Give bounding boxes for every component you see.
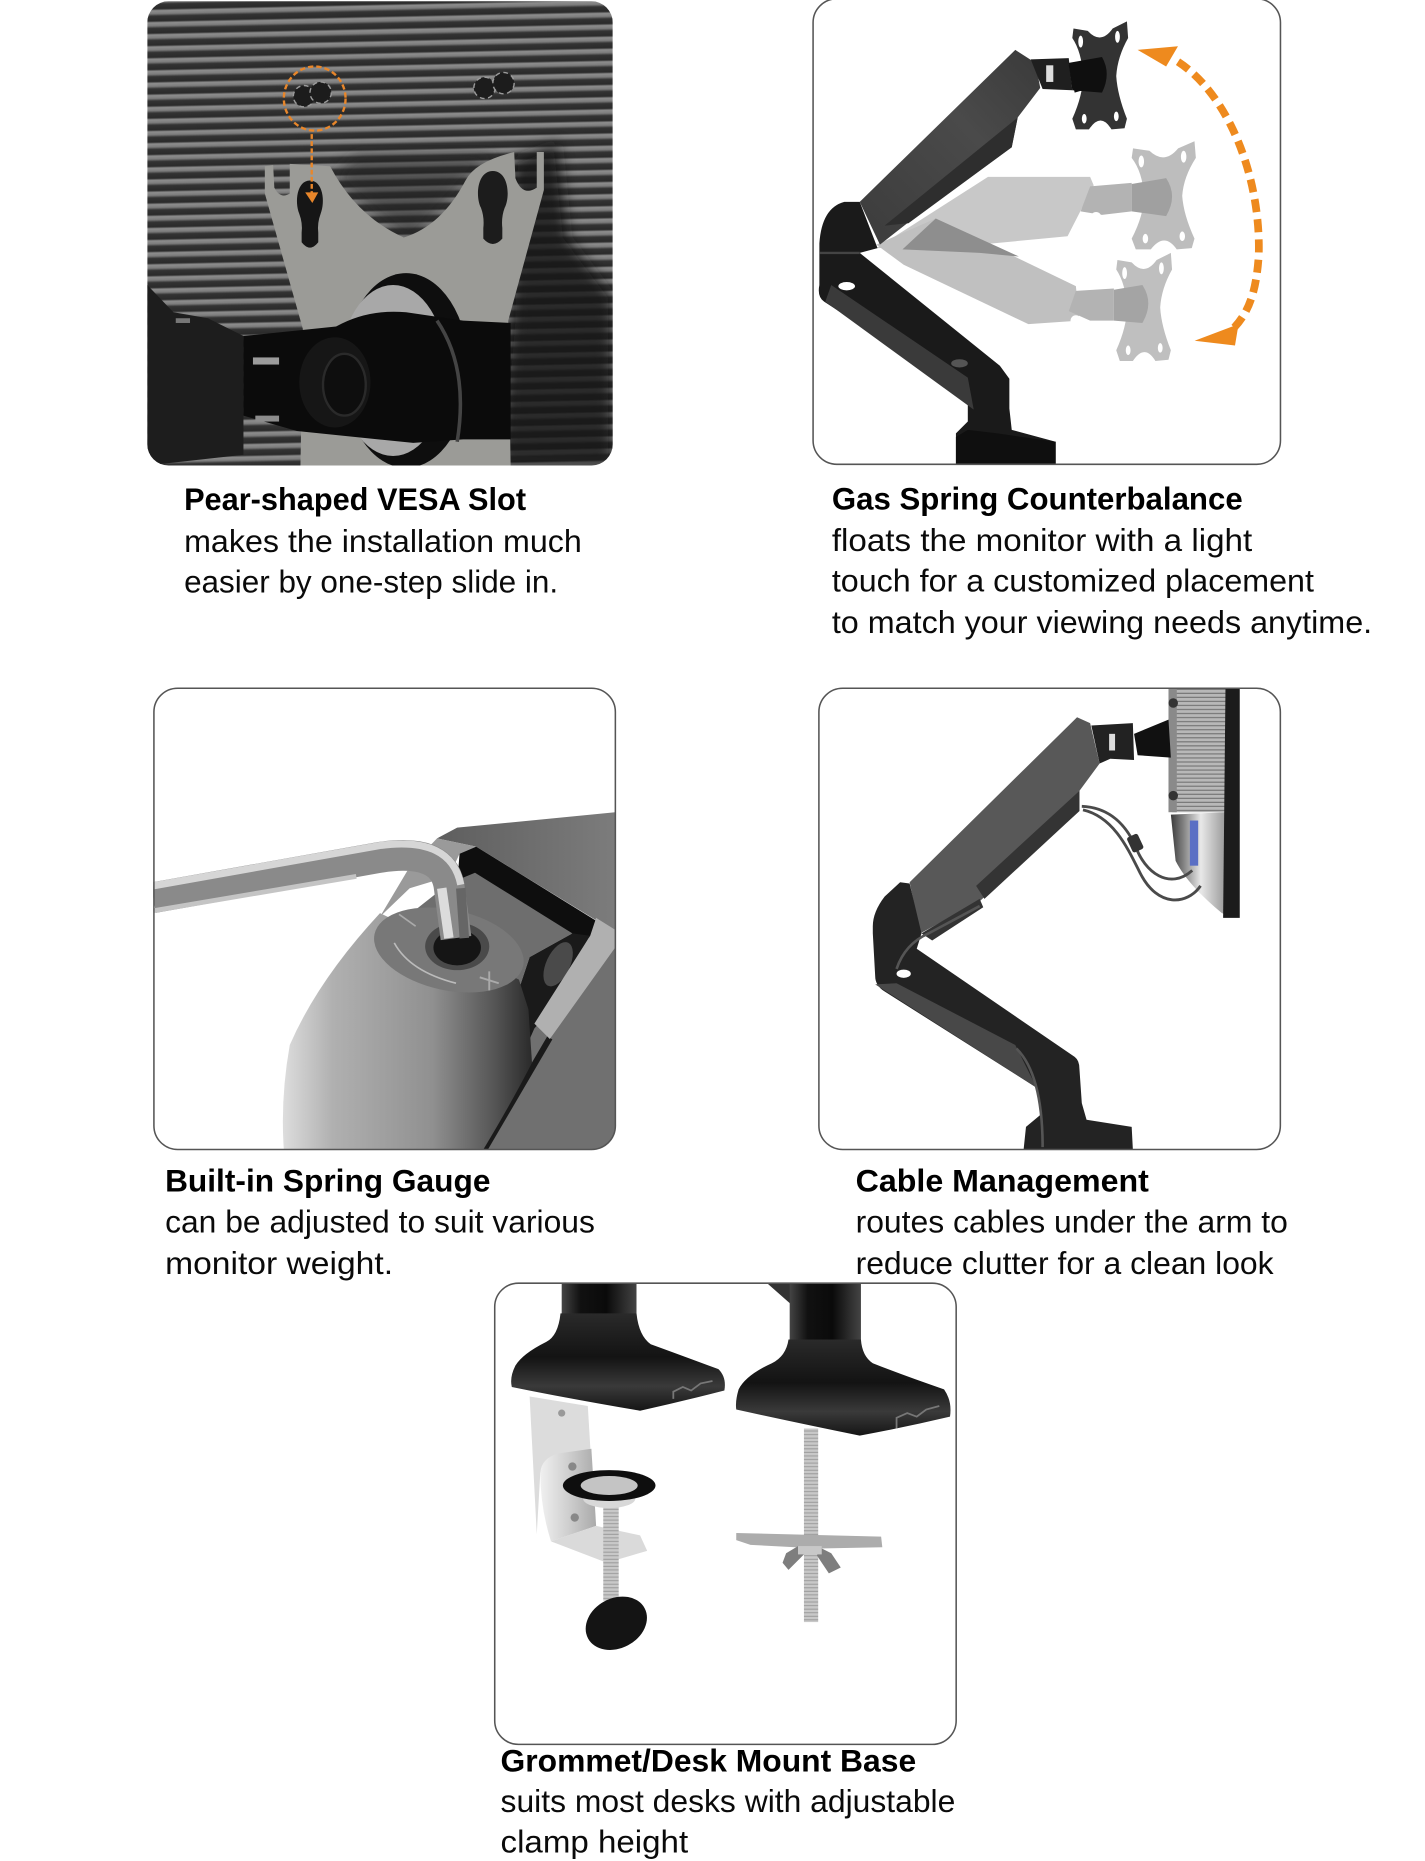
frame strip — [534, 918, 615, 1039]
text block: Cable Management — [856, 1164, 1288, 1281]
arm top housing — [437, 812, 615, 932]
orange curved arrow — [1138, 46, 1259, 346]
text block: Pear-shaped VESA Slot: Pear-shaped VESA Slot — [184, 482, 527, 517]
ghost connector: mid — [1080, 182, 1132, 215]
text block: Gas Spring Counterbalance — [832, 481, 1372, 640]
right base — [736, 1280, 951, 1436]
spring recess — [520, 934, 590, 1038]
VESA plate — [265, 152, 544, 465]
shadow on monitor back — [499, 142, 613, 465]
clamp: bracket plate — [540, 1449, 596, 1541]
screw: right — [474, 72, 514, 99]
arm cable routing — [897, 906, 1043, 1147]
text block: Grommet/Desk Mount Base: suits most desks with adjustable — [501, 1784, 955, 1819]
text block: Built-in Spring Gauge — [165, 1164, 595, 1281]
pear-shaped slot: left — [297, 180, 323, 248]
text block: Gas Spring Counterbalance: floats the monitor with a light — [832, 523, 1252, 558]
blue VGA connector — [1190, 821, 1198, 866]
clamp: screw — [603, 1506, 619, 1601]
black arm — [243, 312, 511, 443]
orange dashed circle — [284, 66, 346, 131]
text block: Pear-shaped VESA Slot: easier by one-step slide in. — [184, 565, 558, 600]
gauge head body — [283, 913, 532, 1149]
text block: Grommet/Desk Mount Base: clamp height — [501, 1824, 688, 1859]
text block: Built-in Spring Gauge: can be adjusted to suit various — [165, 1205, 595, 1240]
base — [956, 430, 1056, 464]
text block: Cable Management: Cable Management — [856, 1164, 1149, 1199]
clamp: vertical bracket — [530, 1396, 591, 1534]
gauge markings — [394, 943, 456, 983]
ghost arm: low — [876, 236, 1079, 324]
housing frame — [380, 838, 476, 917]
text block: Pear-shaped VESA Slot — [184, 482, 582, 600]
elbow and lower arm — [873, 882, 1133, 1149]
text block: Built-in Spring Gauge: Built-in Spring Gauge — [165, 1164, 490, 1199]
panel border: gas spring — [813, 0, 1280, 464]
black window — [457, 847, 597, 938]
inner plate — [418, 872, 572, 984]
gauge ring — [374, 908, 524, 992]
monitor ribbed back — [1172, 688, 1225, 812]
panel: VESA slot photo — [147, 1, 613, 468]
panel: gas spring photo — [819, 21, 1259, 464]
panel border: desk mount — [495, 1283, 956, 1744]
ghost VESA plate: mid — [1132, 141, 1196, 249]
arm bracket — [147, 285, 243, 465]
clamp: pad — [563, 1470, 656, 1508]
clamp: knob — [576, 1586, 656, 1660]
hex key — [153, 844, 464, 938]
panel: cable management photo — [873, 688, 1240, 1149]
left base — [511, 1280, 725, 1411]
grommet: plate — [736, 1533, 882, 1548]
text block: Grommet/Desk Mount Base: Grommet/Desk Mount Base — [501, 1744, 916, 1779]
text block: Pear-shaped VESA Slot: makes the installation much — [184, 524, 582, 559]
dome ring — [350, 273, 460, 466]
text block: Gas Spring Counterbalance: to match your viewing needs anytime. — [832, 605, 1372, 640]
ghost arm: mid — [876, 177, 1094, 248]
panel border: spring gauge — [154, 688, 615, 1149]
text block: Built-in Spring Gauge: monitor weight. — [165, 1246, 393, 1281]
ghost VESA plate: low — [1116, 253, 1172, 361]
text block: Cable Management: reduce clutter for a clean look — [856, 1246, 1274, 1281]
ghost connector: low — [1069, 288, 1114, 322]
monitor bezel — [1223, 688, 1240, 918]
cables — [1082, 806, 1201, 900]
upper arm — [910, 717, 1100, 940]
upper arm — [860, 50, 1040, 245]
connector — [1030, 58, 1081, 93]
text block: Grommet/Desk Mount Base — [501, 1744, 955, 1859]
screw: left — [293, 82, 331, 107]
panel border: cable management — [819, 688, 1280, 1149]
lower right housing — [481, 938, 615, 1149]
orange arrow — [305, 134, 318, 203]
connector — [1091, 720, 1171, 764]
panel: desk mount photo — [511, 1280, 951, 1660]
text block: Gas Spring Counterbalance: Gas Spring Counterbalance — [832, 481, 1243, 516]
cable clip — [1126, 833, 1144, 853]
text block: Gas Spring Counterbalance: touch for a customized placement — [832, 563, 1314, 598]
monitor mount plate — [1168, 688, 1178, 812]
text block: Cable Management: routes cables under the arm to — [856, 1205, 1288, 1240]
clamp: foot — [551, 1526, 647, 1563]
monitor lower back — [1171, 812, 1225, 914]
elbow and lower arm — [819, 202, 1056, 464]
grommet: wing nut — [783, 1546, 841, 1573]
panel: spring gauge photo — [153, 812, 615, 1149]
pear-shaped slot: right — [478, 171, 508, 244]
VESA plate: upper — [1072, 21, 1128, 129]
grommet: threaded rod — [804, 1429, 818, 1622]
